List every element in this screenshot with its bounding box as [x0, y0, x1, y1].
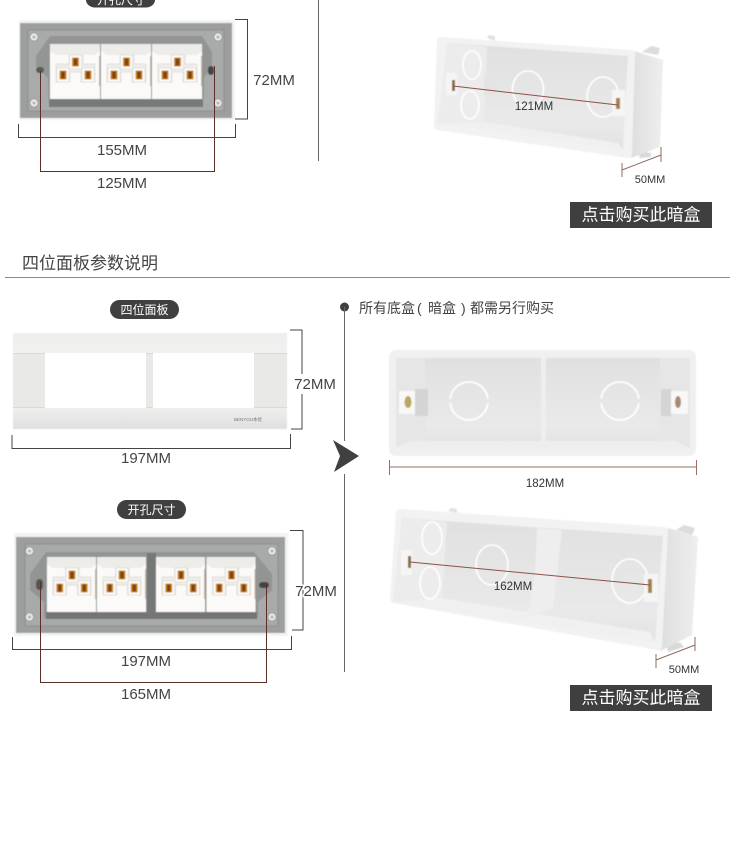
width dimension 182MM	[390, 460, 696, 490]
buy button bottom	[570, 685, 712, 711]
height dimension 72MM	[290, 330, 336, 429]
note text: 都需另行购买	[470, 300, 554, 316]
width dimension 182MM: 182MM	[526, 478, 564, 490]
three-gang socket photo	[19, 20, 235, 120]
width dimension 197MM	[12, 636, 292, 670]
section heading: 四位面板参数说明	[22, 254, 158, 273]
pill label: cutout size	[117, 500, 186, 519]
four-gang socket photo	[14, 533, 288, 636]
four-gang white panel: BENYOU本优	[234, 416, 262, 423]
section: four-gang panel	[12, 300, 336, 467]
screw spacing dimension 125MM	[40, 66, 214, 192]
pill label: four-gang panel	[110, 300, 179, 319]
depth dimension 50MM: 50MM	[669, 664, 699, 676]
depth dimension 50MM: 50MM	[635, 174, 665, 186]
screw spacing dimension 165MM	[40, 582, 266, 703]
pill label: cutout size (cropped)	[86, 0, 155, 8]
height dimension 72MM: 72MM	[294, 376, 336, 393]
buy button bottom: 点击购买此暗盒	[582, 688, 700, 708]
timeline with dot and arrow	[333, 302, 359, 672]
arrow icon	[333, 440, 359, 472]
four-gang white panel	[13, 333, 287, 429]
label 162MM: 162MM	[494, 581, 532, 593]
pill label: cutout size: 开孔尺寸	[127, 503, 176, 517]
pill label: four-gang panel: 四位面板	[120, 302, 169, 317]
vertical divider top	[318, 0, 320, 161]
section: three-gang cutout dimensions	[18, 0, 295, 192]
screw spacing dimension 125MM: 125MM	[97, 175, 147, 192]
three-gang back box photo	[434, 35, 663, 158]
height dimension 72MM: 72MM	[295, 583, 337, 600]
note text: 暗盒	[428, 300, 456, 316]
height dimension 72MM	[235, 20, 295, 119]
four-gang back box angled photo	[390, 508, 698, 652]
screw spacing dimension 165MM: 165MM	[121, 686, 171, 703]
depth dimension 50MM	[622, 147, 665, 186]
four-gang back box front photo	[389, 350, 696, 456]
width dimension 197MM: 197MM	[121, 653, 171, 670]
buy button top: 点击购买此暗盒	[582, 206, 700, 224]
note text: 所有底盒	[359, 300, 415, 316]
buy button top	[570, 202, 712, 228]
width dimension 155MM	[18, 124, 236, 159]
note text: )	[461, 300, 466, 316]
width dimension 197MM	[12, 434, 290, 467]
height dimension 72MM: 72MM	[253, 72, 295, 89]
depth dimension 50MM	[656, 637, 699, 676]
section: four-gang cutout dimensions	[12, 500, 337, 703]
height dimension 72MM	[290, 530, 337, 630]
label 121MM: 121MM	[515, 101, 553, 113]
note text: (	[417, 300, 422, 316]
width dimension 155MM: 155MM	[97, 142, 147, 159]
width dimension 197MM: 197MM	[121, 450, 171, 467]
